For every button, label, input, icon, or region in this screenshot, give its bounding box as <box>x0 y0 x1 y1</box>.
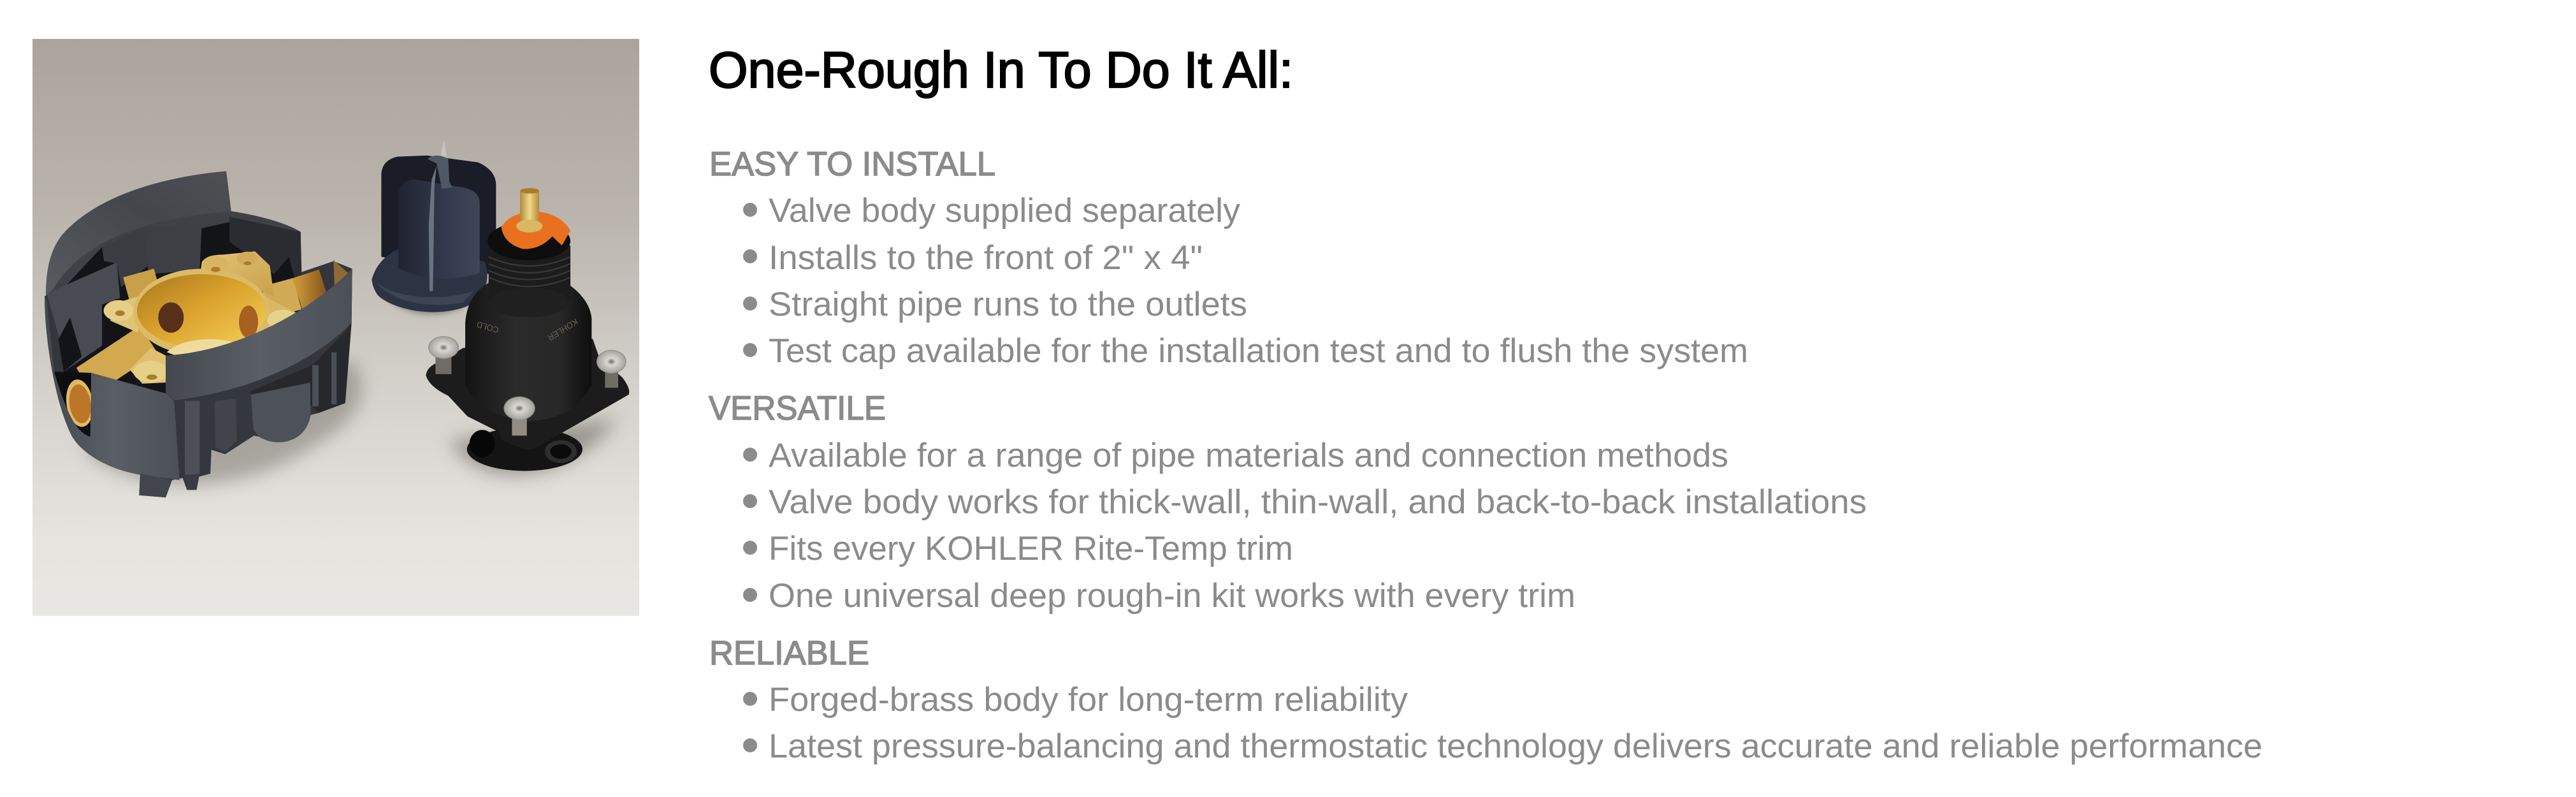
molded body lettering <box>477 319 578 340</box>
photo backdrop <box>33 39 639 616</box>
section: versatile <box>709 390 1867 615</box>
brass pipe stubs <box>85 281 324 381</box>
bullet list: versatile <box>743 437 1867 615</box>
heading: reliable: RELIABLE <box>709 634 869 672</box>
bullet list: versatile: Valve body works for thick-wall, thin-wall, and back-to-back installations <box>769 483 1867 521</box>
mounting screws <box>428 336 626 435</box>
open pipe end in shell cut-out <box>54 372 92 437</box>
bullet list: versatile: One universal deep rough-in kit works with every trim <box>769 577 1575 615</box>
bullet list: versatile: Available for a range of pipe materials and connection methods <box>769 437 1728 474</box>
heading: versatile: VERSATILE <box>709 390 886 427</box>
brass stem <box>516 188 542 233</box>
orange indexing ring <box>502 211 570 249</box>
product photo: rough-in valve kit <box>33 39 639 616</box>
valve body in plastic mounting shell <box>45 171 362 497</box>
plastic front band and lower body <box>45 269 352 497</box>
bullet list: reliable: Forged-brass body for long-term reliability <box>769 681 1408 719</box>
bullet list: easy to install: Valve body supplied separately <box>769 192 1240 230</box>
bullet list: easy to install <box>743 192 1748 370</box>
bullet list: reliable: Latest pressure-balancing and thermostatic technology delivers accurate and reliable performance <box>769 728 2262 765</box>
pressure-balancing cartridge <box>426 188 629 474</box>
bullet list: reliable <box>743 681 2262 765</box>
molded body lettering: KOHLER <box>546 317 579 343</box>
heading: easy to install: EASY TO INSTALL <box>709 145 995 183</box>
brass valve body <box>104 251 298 384</box>
molded body lettering: COLD <box>475 319 500 335</box>
bullet list: easy to install: Installs to the front of 2" x 4" <box>769 239 1203 277</box>
title: One-Rough In To Do It All: <box>709 41 1293 98</box>
bullet list: easy to install: Test cap available for the installation test and to flush the system <box>769 332 1748 370</box>
section: reliable <box>709 634 2262 765</box>
bullet list: versatile: Fits every KOHLER Rite-Temp trim <box>769 530 1293 567</box>
test cap <box>372 140 496 315</box>
bullet list: easy to install: Straight pipe runs to the outlets <box>769 286 1247 323</box>
section: easy to install <box>709 145 1748 370</box>
